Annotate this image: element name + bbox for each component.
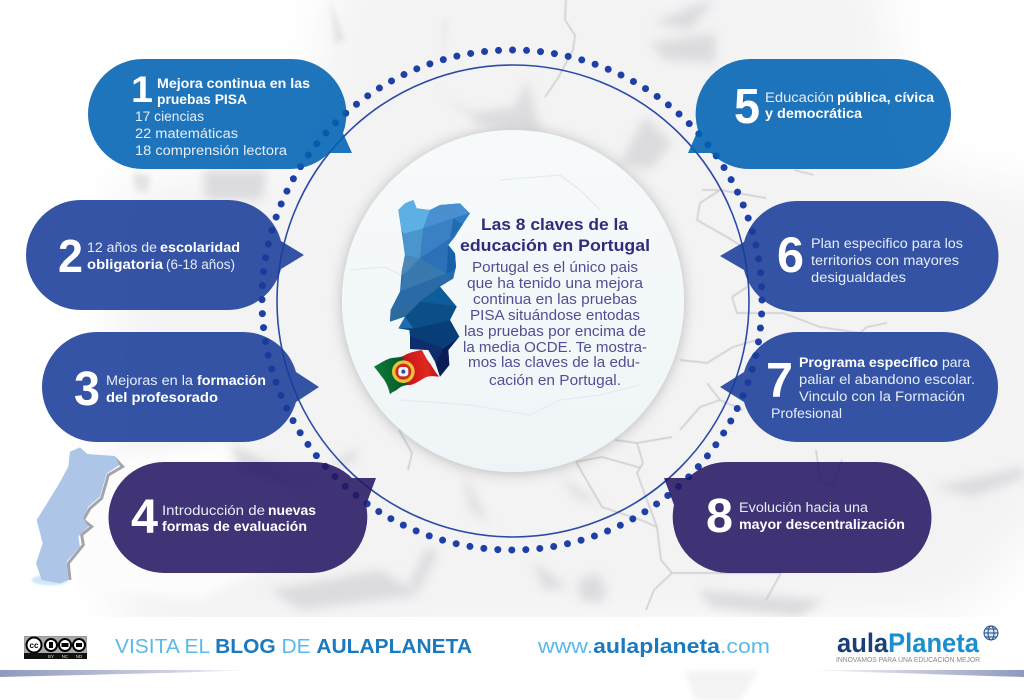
text 1: 17 ciencias bbox=[135, 109, 204, 124]
center text block bbox=[463, 260, 647, 389]
thin ring bbox=[277, 65, 749, 537]
text 2: escolaridad bbox=[160, 240, 240, 255]
center: faint borders bbox=[350, 175, 640, 415]
icon: creative commons badge: NC bbox=[62, 654, 69, 659]
center text block: cación en Portugal. bbox=[489, 373, 621, 389]
icon: creative commons badge: cc bbox=[30, 641, 39, 650]
text 1: pruebas PISA bbox=[157, 92, 247, 107]
text 6: desigualdades bbox=[811, 270, 906, 285]
number 3: 3 bbox=[74, 363, 100, 416]
center heading: educación en Portugal bbox=[460, 237, 650, 255]
number 1: 1 bbox=[131, 69, 153, 110]
panel: clave 8 bbox=[664, 462, 931, 573]
text 7: Vinculo con la Formación bbox=[799, 389, 965, 404]
text 7 bbox=[771, 355, 975, 421]
text 5 bbox=[765, 90, 935, 121]
number 8: 8 bbox=[706, 490, 733, 543]
text 7: Programa específico bbox=[799, 355, 938, 370]
text 5: Educación bbox=[765, 90, 834, 105]
text 3: del profesorado bbox=[106, 390, 218, 405]
text 6: territorios con mayores bbox=[811, 253, 959, 268]
center text block: Portugal es el único pais bbox=[472, 260, 638, 276]
panel: clave 2 bbox=[26, 200, 304, 310]
text 8: mayor descentralización bbox=[739, 517, 905, 532]
center text block: la media OCDE. Te mostra- bbox=[463, 340, 647, 356]
logo: aulaPlaneta: aulaPlaneta bbox=[837, 628, 980, 658]
icon: creative commons badge bbox=[24, 636, 87, 659]
text 4 bbox=[162, 503, 316, 534]
text 8 bbox=[739, 500, 905, 532]
text 2 bbox=[87, 240, 240, 272]
footer background bbox=[0, 617, 1024, 700]
text 6: Plan especifico para los bbox=[811, 236, 963, 251]
panel: clave 6 bbox=[720, 201, 999, 312]
text 5: pública, cívica bbox=[837, 90, 935, 105]
panel: clave 7 bbox=[720, 332, 998, 442]
text 7: paliar el abandono escolar. bbox=[799, 372, 975, 387]
center text block: PISA situándose entodas bbox=[470, 308, 640, 324]
text 6 bbox=[811, 236, 963, 285]
panel: clave 4 bbox=[109, 462, 376, 573]
number 2: 2 bbox=[58, 230, 83, 282]
number 5: 5 bbox=[734, 80, 760, 134]
icon: globe bbox=[984, 626, 998, 640]
panel: clave 3 bbox=[42, 332, 319, 442]
text 7: para bbox=[942, 355, 970, 370]
icon: creative commons badge: ND bbox=[76, 654, 83, 659]
text 1: 18 comprensión lectora bbox=[135, 143, 288, 158]
text 4: formas de evaluación bbox=[162, 519, 307, 534]
text 3: formación bbox=[197, 373, 266, 388]
center heading bbox=[460, 216, 650, 255]
footer: blog call to action: VISITA EL BLOG DE AULAPLANETA bbox=[115, 635, 472, 658]
text 2: obligatoria bbox=[87, 257, 164, 272]
panel: clave 1 bbox=[88, 59, 352, 169]
background: europe map bbox=[127, 0, 1024, 617]
text 8: Evolución hacia una bbox=[739, 500, 869, 515]
text 1 bbox=[135, 76, 310, 158]
text 4: nuevas bbox=[268, 503, 316, 518]
text 5: y democrática bbox=[765, 106, 863, 121]
text 1: Mejora continua en las bbox=[157, 76, 310, 91]
icon: portugal map light blue bbox=[32, 447, 123, 585]
icon: creative commons badge: BY bbox=[48, 654, 54, 659]
center text block: mos las claves de la edu- bbox=[468, 355, 640, 371]
footer: website: www. aulaplaneta .com bbox=[537, 635, 770, 658]
text 2: (6-18 años) bbox=[166, 257, 235, 272]
text 4: Introducción de bbox=[162, 503, 265, 518]
text 3 bbox=[106, 373, 266, 405]
icon: portugal low-poly map bbox=[374, 195, 473, 394]
number 6: 6 bbox=[777, 227, 804, 283]
number 4: 4 bbox=[131, 491, 158, 544]
center text block: que ha tenido una mejora bbox=[467, 276, 644, 292]
dotted ring bbox=[262, 50, 762, 550]
central circle panel bbox=[342, 130, 684, 472]
text 3: Mejoras en la bbox=[106, 373, 194, 388]
panel: clave 5 bbox=[688, 59, 951, 169]
text 7: Profesional bbox=[771, 406, 842, 421]
number 7: 7 bbox=[766, 354, 793, 408]
icon: portuguese flag bbox=[374, 350, 439, 394]
center heading: Las 8 claves de la bbox=[481, 216, 629, 234]
center text block: las pruebas por encima de bbox=[464, 324, 646, 340]
text 2: 12 años de bbox=[87, 240, 157, 255]
logo tagline: INNOVAMOS PARA UNA EDUCACIÓN MEJOR bbox=[836, 655, 980, 664]
text 1: 22 matemáticas bbox=[135, 126, 238, 141]
center text block: continua en las pruebas bbox=[473, 292, 637, 308]
